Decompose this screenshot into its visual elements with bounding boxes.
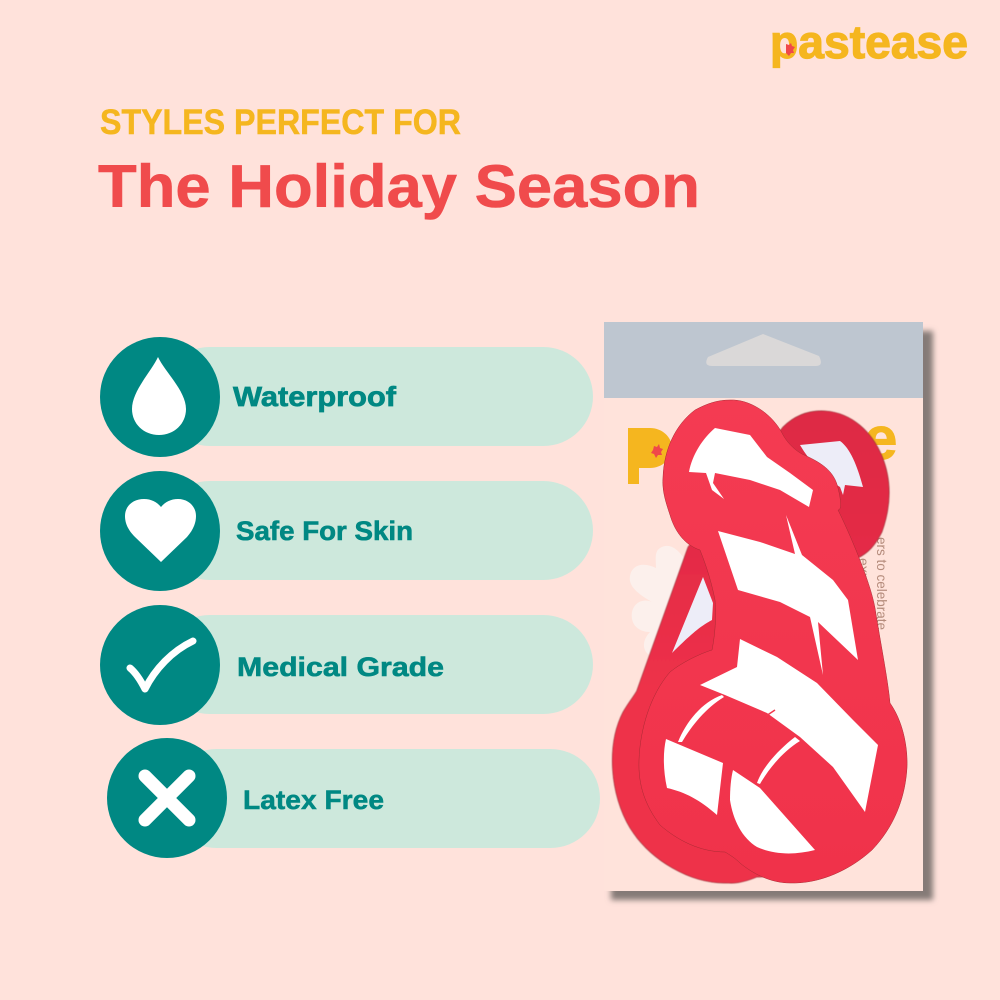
- package card: [604, 322, 923, 891]
- pastie: rear: [612, 411, 889, 883]
- package shadow: [611, 331, 933, 900]
- feature: latex free: [107, 738, 600, 858]
- feature: waterproof: [100, 337, 593, 457]
- feature: latex free: Latex Free: [243, 785, 384, 815]
- package logo: e: [864, 405, 897, 472]
- feature: medical grade: [100, 605, 593, 725]
- product package: [604, 322, 933, 900]
- package fine print: [856, 537, 890, 630]
- package fine print: ers to celebrate: [874, 537, 890, 630]
- pastie: front: [639, 400, 907, 883]
- flower decoration: [630, 546, 684, 657]
- package fine print: exp: [856, 558, 872, 581]
- icon: check mark: [130, 641, 193, 689]
- feature: medical grade: Medical Grade: [237, 652, 444, 682]
- logo: pastease: pastease: [770, 16, 968, 68]
- icon: heart: [125, 499, 196, 562]
- feature: safe for skin: [100, 471, 593, 591]
- hang hole: [706, 334, 821, 366]
- stripes: [664, 428, 878, 853]
- package logo: [628, 405, 897, 484]
- feature: safe for skin: Safe For Skin: [236, 516, 413, 546]
- title: the holiday season: The Holiday Season: [98, 153, 700, 220]
- feature: waterproof: Waterproof: [233, 381, 397, 412]
- icon: cross: [145, 776, 189, 820]
- heading: styles perfect for: STYLES PERFECT FOR: [100, 103, 461, 142]
- icon: water drop: [132, 357, 186, 435]
- package header: [604, 322, 923, 398]
